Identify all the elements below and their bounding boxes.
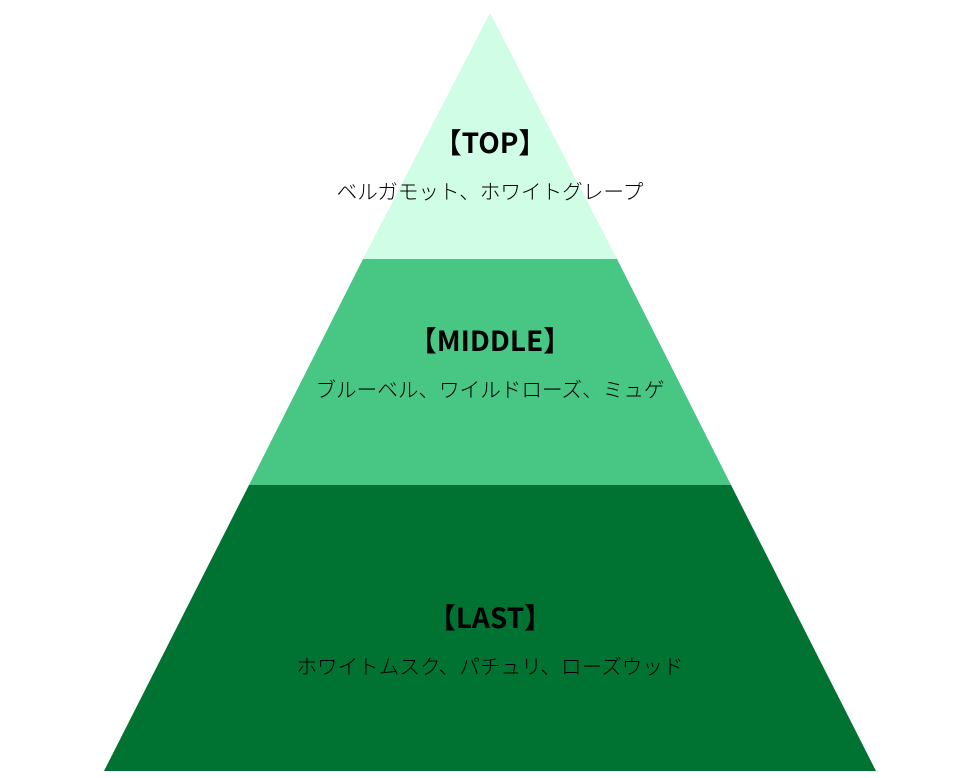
text block: last notes: ホワイトムスク、パチュリ、ローズウッド bbox=[296, 650, 684, 680]
panel: top tier bbox=[337, 13, 644, 259]
text block: top notes: ベルガモット、ホワイトグレープ bbox=[337, 175, 644, 205]
heading: LAST: 【LAST】 bbox=[428, 597, 552, 637]
heading: TOP: 【TOP】 bbox=[434, 122, 546, 162]
text block: middle notes: ブルーベル、ワイルドローズ、ミュゲ bbox=[315, 373, 665, 403]
heading: MIDDLE: 【MIDDLE】 bbox=[409, 320, 571, 360]
panel: middle tier bbox=[249, 259, 731, 485]
panel: last tier bbox=[104, 485, 876, 771]
